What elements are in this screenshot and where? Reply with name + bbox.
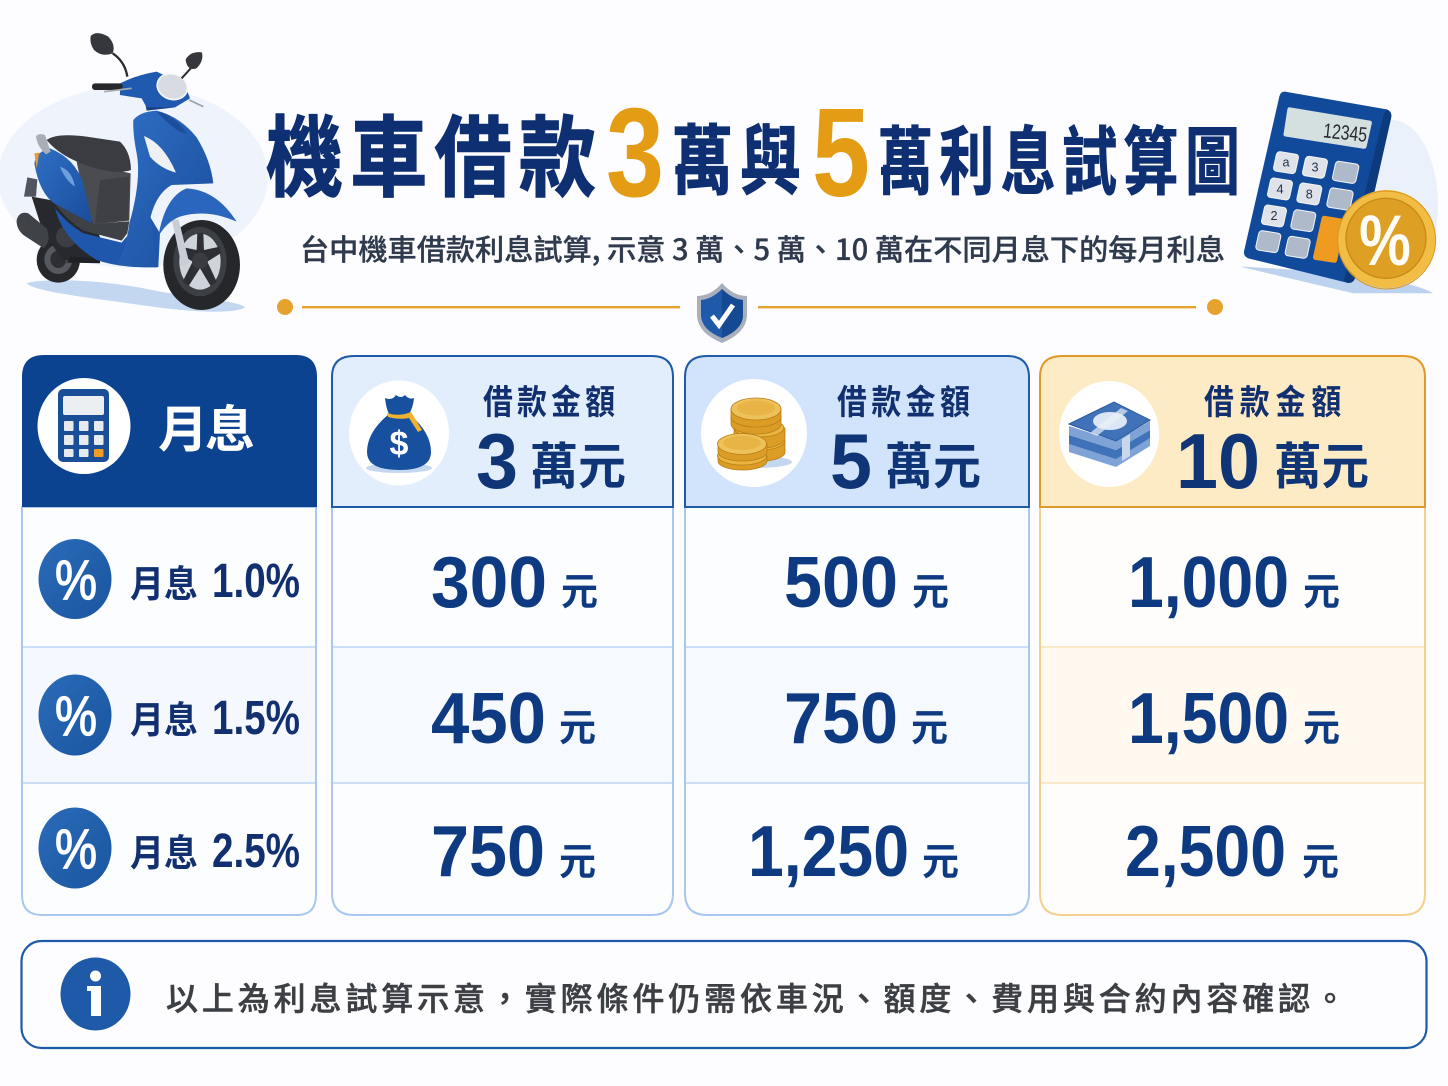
title: 萬利息試算圖: [878, 102, 1240, 210]
values: 元: [911, 697, 948, 752]
rate row 1.0%: [38, 539, 300, 619]
values: 500: [784, 543, 898, 623]
panel: loan 3萬 column: [332, 356, 673, 915]
calculator and percent coin illustration: 12345: [1322, 119, 1368, 147]
values: 750: [784, 679, 898, 759]
calculator and percent coin illustration: [1240, 92, 1438, 293]
rate row 1.5%: [38, 674, 300, 756]
rate row 1.0%: 月息: [130, 554, 198, 608]
values: 元: [559, 831, 596, 886]
calculator and percent coin illustration: 2: [1270, 209, 1278, 223]
header: monthly rate: 月息: [158, 390, 255, 462]
panel: loan 10萬 column: [1040, 356, 1425, 915]
header: loan amount 3萬元: 借款金額: [483, 376, 615, 425]
header: loan amount 10萬元: [1176, 376, 1369, 505]
values: 2,500: [1125, 812, 1286, 892]
scooter illustration: [0, 33, 268, 312]
header: loan amount 5萬元: 萬元: [885, 427, 981, 499]
rate row 1.5%: 1.5%: [212, 692, 300, 745]
rate row 2.5%: %: [55, 817, 97, 880]
header: loan amount 5萬元: [830, 376, 981, 505]
subtitle: 台中機車借款利息試算, 示意 3 萬、5 萬、10 萬在不同月息下的每月利息: [300, 227, 1225, 269]
icon: calculator: [38, 378, 130, 474]
rate row 2.5%: 2.5%: [212, 825, 300, 878]
calculator and percent coin illustration: 4: [1276, 182, 1284, 196]
header: loan amount 3萬元: [476, 376, 626, 505]
title: 機車借款: [266, 87, 596, 215]
values: 元: [912, 561, 949, 616]
icon: stack of banknotes: [1059, 381, 1159, 487]
values: [748, 543, 959, 892]
values: [431, 543, 598, 892]
rate row 1.5%: %: [55, 684, 97, 747]
panel: loan 5萬 column: [685, 356, 1029, 915]
calculator and percent coin illustration: a: [1282, 156, 1290, 170]
title: 5: [812, 82, 870, 223]
note text: 以上為利息試算示意，實際條件仍需依車況、額度、費用與合約內容確認。: [166, 974, 1346, 1020]
header: loan amount 5萬元: 借款金額: [837, 376, 970, 425]
icon: shield check: [697, 283, 747, 343]
values: 750: [431, 812, 545, 892]
divider with shield: [277, 283, 1223, 343]
values: 1,000: [1128, 543, 1289, 623]
header: loan amount 3萬元: 3: [476, 417, 518, 505]
values: [1125, 543, 1340, 892]
icon: gold coins: [701, 379, 807, 487]
rate row 2.5%: 月息: [130, 823, 198, 877]
values: 1,250: [748, 812, 909, 892]
rate row 1.0%: 1.0%: [212, 555, 300, 608]
values: 1,500: [1128, 679, 1289, 759]
header: loan amount 10萬元: 萬元: [1274, 427, 1369, 499]
rate row 2.5%: [38, 808, 300, 888]
values: 元: [1303, 561, 1340, 616]
values: 元: [559, 697, 596, 752]
icon: money bag: [349, 380, 449, 486]
title: 3: [606, 82, 664, 223]
header: loan amount 5萬元: 5: [830, 417, 872, 505]
panel: monthly rate column: [22, 355, 317, 915]
values: 元: [561, 561, 598, 616]
values: 元: [922, 831, 959, 886]
values: 元: [1302, 831, 1339, 886]
icon: info: [60, 958, 130, 1030]
title: 萬與: [672, 100, 801, 210]
calculator and percent coin illustration: 3: [1311, 161, 1319, 175]
calculator and percent coin illustration: %: [1359, 201, 1411, 281]
values: 450: [431, 679, 546, 759]
rate row 1.0%: %: [55, 548, 97, 611]
values: 元: [1303, 697, 1340, 752]
rate row 1.5%: 月息: [130, 690, 198, 744]
header: loan amount 10萬元: 借款金額: [1204, 376, 1341, 425]
header: loan amount 10萬元: 10: [1176, 417, 1260, 505]
values: 300: [431, 543, 547, 623]
calculator and percent coin illustration: 8: [1306, 187, 1313, 201]
title: [266, 82, 1240, 223]
icon: money bag: $: [390, 425, 409, 463]
callout: note: [22, 941, 1426, 1048]
header: loan amount 3萬元: 萬元: [530, 427, 626, 499]
